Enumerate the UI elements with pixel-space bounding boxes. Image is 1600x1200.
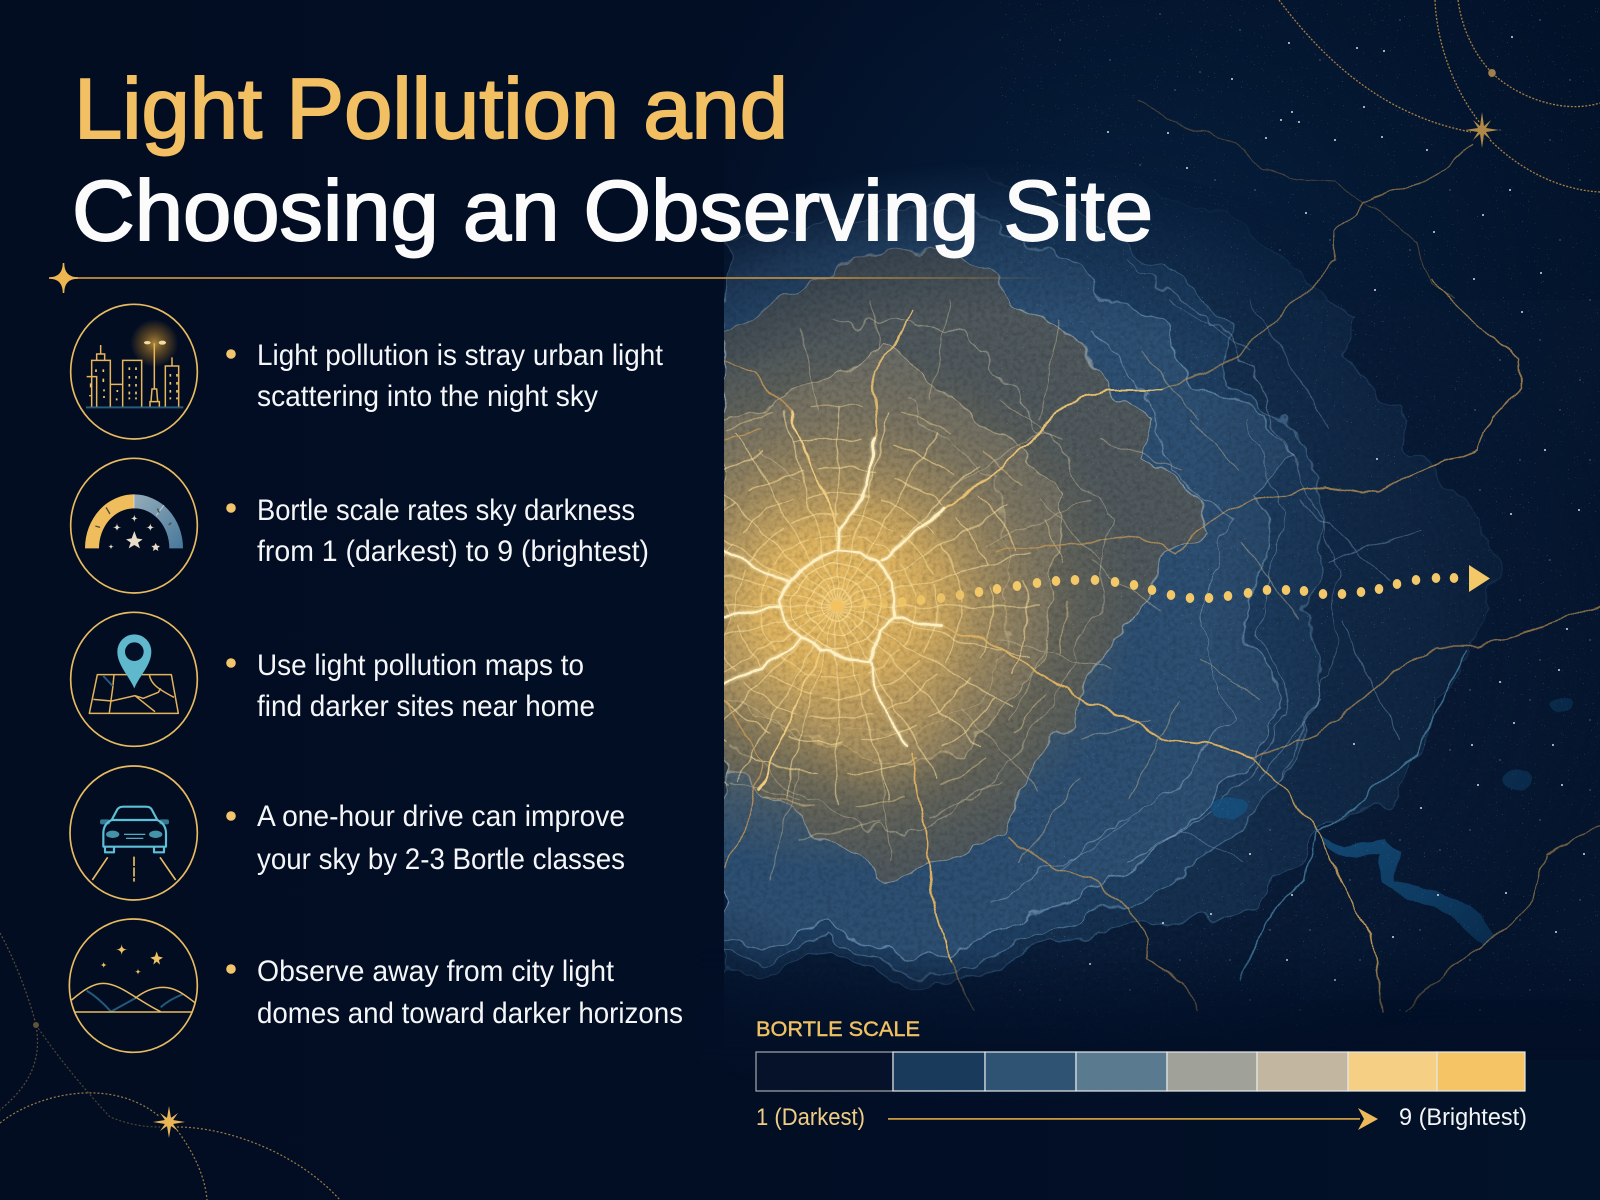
bullet 1 xyxy=(226,339,664,413)
decoration: top-right star xyxy=(1465,112,1499,148)
icon: map with location pin xyxy=(71,612,197,746)
icon: city skyline with street lamp xyxy=(71,304,197,439)
icon: dark hills under stars xyxy=(69,919,197,1052)
bullet 1: scattering into the night sky xyxy=(257,380,598,413)
stars in the dark sky xyxy=(1020,14,1590,1030)
scale direction arrow xyxy=(888,1108,1378,1130)
bright gold city glow xyxy=(724,369,1109,850)
decoration: top-right orbit arcs xyxy=(1279,0,1600,192)
bullet 3 xyxy=(226,649,595,723)
Bortle scale legend xyxy=(756,1018,1527,1131)
decoration: bottom-left orbit arcs xyxy=(0,933,340,1200)
scale start label: 1 (Darkest) xyxy=(756,1104,865,1131)
legend heading: BORTLE SCALE xyxy=(756,1018,920,1041)
bullet 1: Light pollution is stray urban light xyxy=(257,339,664,372)
bullet 5: Observe away from city light xyxy=(257,955,615,988)
faint dust speckle over dark sky xyxy=(1000,0,1600,1060)
bullet 4 xyxy=(226,800,625,876)
bullet 4: A one-hour drive can improve xyxy=(257,800,625,833)
decoration: bottom-left star xyxy=(153,1106,185,1138)
title divider with star xyxy=(49,263,1056,293)
scale end label: 9 (Brightest) xyxy=(1399,1104,1527,1131)
colour scale bar xyxy=(756,1052,1525,1091)
bullet 2 xyxy=(226,494,649,568)
title: Choosing an Observing Site xyxy=(72,164,1153,259)
icon: Bortle gauge xyxy=(71,458,197,593)
bullet 4: your sky by 2-3 Bortle classes xyxy=(257,843,625,876)
bottom fade behind scale xyxy=(700,950,1600,1060)
road web in city xyxy=(724,300,1422,963)
far roads across the dark sky xyxy=(950,100,1600,1010)
river and lakes xyxy=(1213,697,1574,945)
bullet 2: Bortle scale rates sky darkness xyxy=(257,494,635,527)
bullet 5 xyxy=(226,955,683,1030)
bullet 5: domes and toward darker horizons xyxy=(257,997,683,1030)
bullet 3: Use light pollution maps to xyxy=(257,649,584,682)
title: Light Pollution and xyxy=(74,62,788,157)
dotted arrow: drive from city to dark sky xyxy=(862,565,1490,609)
title xyxy=(72,62,1153,259)
icon: car on road xyxy=(70,766,197,900)
map: light pollution zones around city xyxy=(724,171,1574,1004)
bullet 2: from 1 (darkest) to 9 (brightest) xyxy=(257,535,649,568)
bullet 3: find darker sites near home xyxy=(257,690,595,723)
